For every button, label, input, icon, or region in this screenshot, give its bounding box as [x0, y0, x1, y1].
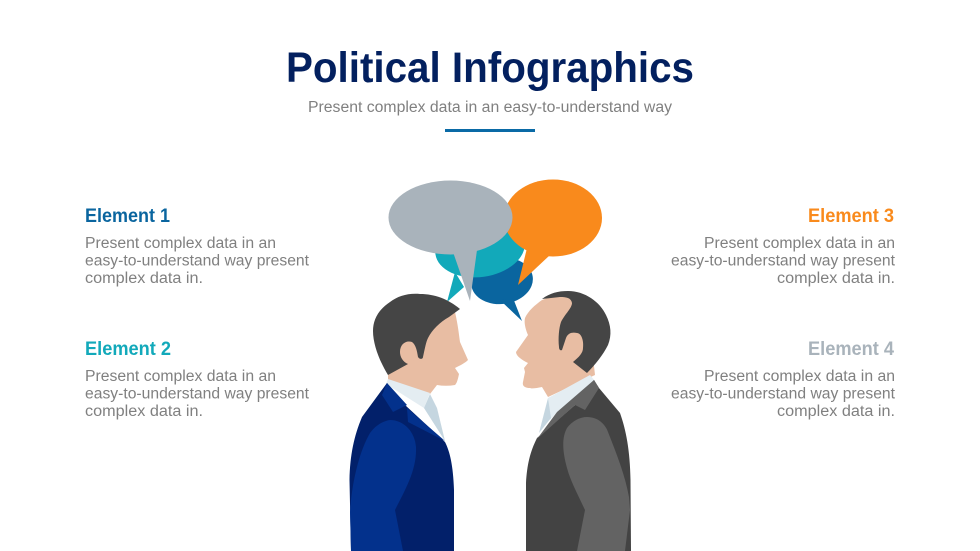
right man face and neck [516, 295, 595, 397]
right man lapel [537, 380, 599, 439]
person: left man in blue suit [350, 291, 631, 551]
text block: Element 1: Present complex data in an [85, 235, 276, 252]
speech bubble: teal [431, 213, 529, 302]
text block: Element 2 [85, 339, 310, 420]
title underline [445, 129, 535, 132]
text block: Element 1: easy-to-understand way present [85, 252, 310, 270]
left man arm [350, 420, 416, 551]
right man hair [542, 291, 610, 373]
speech bubble: blue [468, 254, 536, 321]
text block: Element 3: complex data in. [777, 270, 895, 287]
speech bubble: orange [504, 180, 602, 285]
left man ear [400, 341, 418, 364]
right man suit [526, 380, 631, 551]
text block: Element 4 [671, 339, 896, 420]
title: Political Infographics [286, 44, 694, 92]
left man suit [350, 383, 454, 551]
text block: Element 1: Element 1 [85, 206, 170, 227]
text block: Element 4: Element 4 [808, 339, 894, 360]
text block: Element 2: easy-to-understand way present [85, 386, 310, 402]
text block: Element 1: complex data in. [85, 270, 203, 287]
text block: Element 2: complex data in. [85, 403, 203, 420]
text block: Element 4: Present complex data in an [704, 368, 895, 385]
right man arm [563, 417, 630, 551]
text block: Element 3: easy-to-understand way present [671, 252, 896, 270]
text block: Element 2: Present complex data in an [85, 368, 276, 385]
left man shirt front [424, 394, 445, 441]
text block: Element 4: complex data in. [777, 403, 895, 420]
left man shirt collar [386, 379, 430, 408]
text block: Element 3 [671, 206, 896, 287]
text block: Element 2: Element 2 [85, 339, 171, 360]
text block: Element 3: Element 3 [808, 206, 894, 227]
text block: Element 3: Present complex data in an [704, 235, 895, 252]
text block: Element 4: easy-to-understand way present [671, 386, 896, 402]
subtitle: Present complex data in an easy-to-understand way [308, 99, 672, 116]
text block: Element 1 [85, 206, 310, 287]
speech bubble: grey [388, 180, 512, 301]
right man shirt collar [548, 375, 595, 420]
left man face and neck [388, 312, 468, 394]
left man lapel [382, 383, 445, 441]
right man shirt front [539, 398, 551, 433]
right man ear [562, 333, 583, 362]
left man hair [373, 294, 460, 375]
